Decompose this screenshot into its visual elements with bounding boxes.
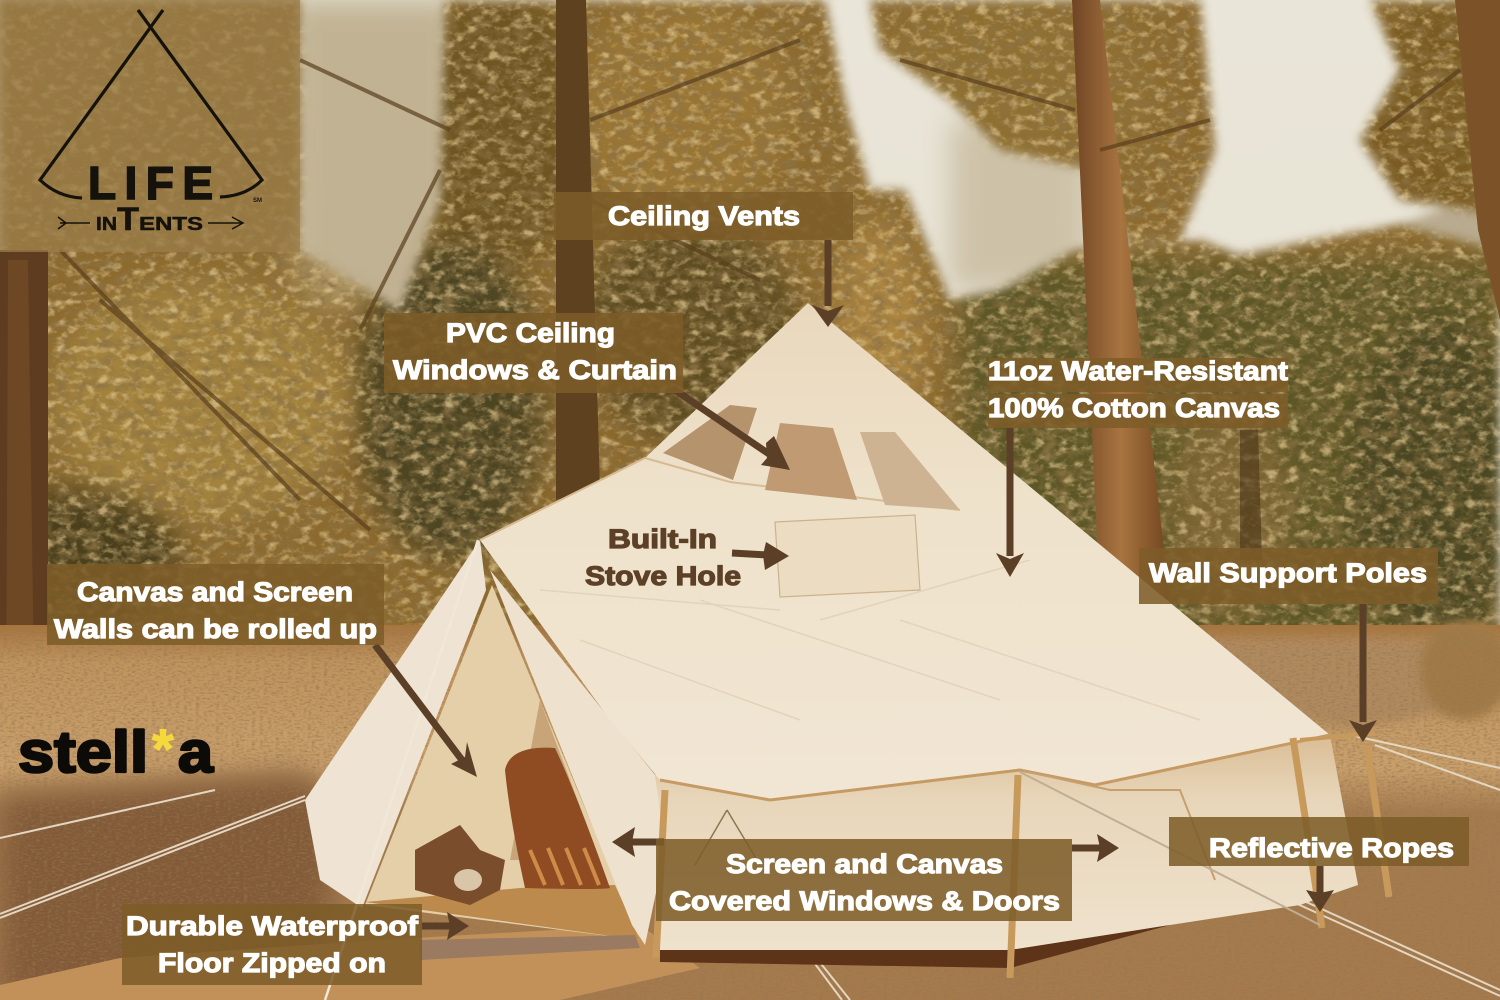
logo: Life InTents: SM [253, 198, 262, 204]
wall seam [1020, 770, 1215, 880]
callout: wall support poles: Wall Support Poles [1149, 558, 1427, 588]
callout: PVC ceiling windows: PVC Ceiling [446, 318, 615, 348]
left door flap [305, 540, 486, 908]
logo: Life InTents: T [117, 201, 140, 237]
support poles [656, 733, 1389, 978]
logo: Life InTents: ENTS [139, 214, 203, 234]
arrow: screen left [612, 827, 664, 857]
main roof [480, 303, 1330, 800]
callout: PVC ceiling windows: Windows & Curtain [393, 355, 677, 385]
arrow: reflective ropes [1306, 866, 1334, 912]
tree trunks and branches [0, 0, 1500, 755]
forest base colours [0, 0, 1500, 660]
arrow: roll-up walls [375, 645, 477, 777]
logo: Life InTents: LIFE [88, 157, 213, 209]
callout: waterproof floor: Durable Waterproof [126, 911, 419, 941]
callout: waterproof floor: Floor Zipped on [158, 948, 386, 978]
chair [505, 748, 610, 889]
ground tarp [0, 925, 700, 1000]
logo: stella: a [178, 720, 214, 785]
callout: ceiling vents [554, 192, 853, 240]
tent [305, 303, 1389, 1000]
arrow: canvas [996, 428, 1024, 577]
stove hole flap [775, 515, 920, 597]
callout: ceiling vents: Ceiling Vents [608, 201, 800, 231]
logo: Life InTents: IN [96, 214, 117, 234]
white guy line across door [325, 540, 478, 1000]
door interior [365, 585, 640, 960]
ground [0, 620, 1500, 1000]
callout: wall support poles [1139, 548, 1438, 604]
tent wall [655, 735, 1358, 950]
arrow: stove hole [732, 542, 789, 570]
callout: roll-up walls: Walls can be rolled up [54, 614, 377, 644]
roof creases [540, 560, 1200, 720]
logo: stella [18, 717, 214, 785]
callout: screen and canvas windows: Screen and Canvas [726, 849, 1003, 879]
ceiling windows [663, 405, 960, 510]
callout: reflective ropes [1169, 817, 1469, 866]
callout: canvas [988, 356, 1288, 428]
callout: screen and canvas windows [656, 839, 1072, 921]
logo: stella: stell [18, 720, 148, 785]
blanket and basket [415, 825, 505, 905]
arrow: screen right [1072, 834, 1119, 862]
logo: stella: * [152, 717, 174, 780]
callout: PVC ceiling windows [384, 313, 683, 393]
logo: Life InTents [40, 10, 262, 237]
logo backing panel [0, 0, 300, 252]
label: built-in stove hole [585, 524, 741, 591]
callout: screen and canvas windows: Covered Windows & Doors [669, 886, 1060, 916]
arrow: PVC windows [672, 388, 790, 470]
callout: roll-up walls [47, 564, 384, 645]
faint tent logo on wall [695, 810, 760, 865]
arrow: ceiling vents [812, 240, 844, 327]
label: built-in stove hole: Built-In [608, 524, 717, 554]
callout: waterproof floor [122, 904, 422, 985]
thin branches over the sky gaps [290, 0, 1090, 320]
callout: canvas: 100% Cotton Canvas [988, 393, 1280, 423]
right door flap [490, 570, 665, 945]
arrow: wall poles [1349, 604, 1377, 742]
callout: canvas: 11oz Water-Resistant [988, 356, 1288, 386]
arrow: floor [422, 912, 469, 940]
callout: roll-up walls: Canvas and Screen [77, 577, 353, 607]
label: built-in stove hole: Stove Hole [585, 561, 741, 591]
guy ropes [0, 735, 1500, 1000]
callout: reflective ropes: Reflective Ropes [1209, 833, 1454, 863]
